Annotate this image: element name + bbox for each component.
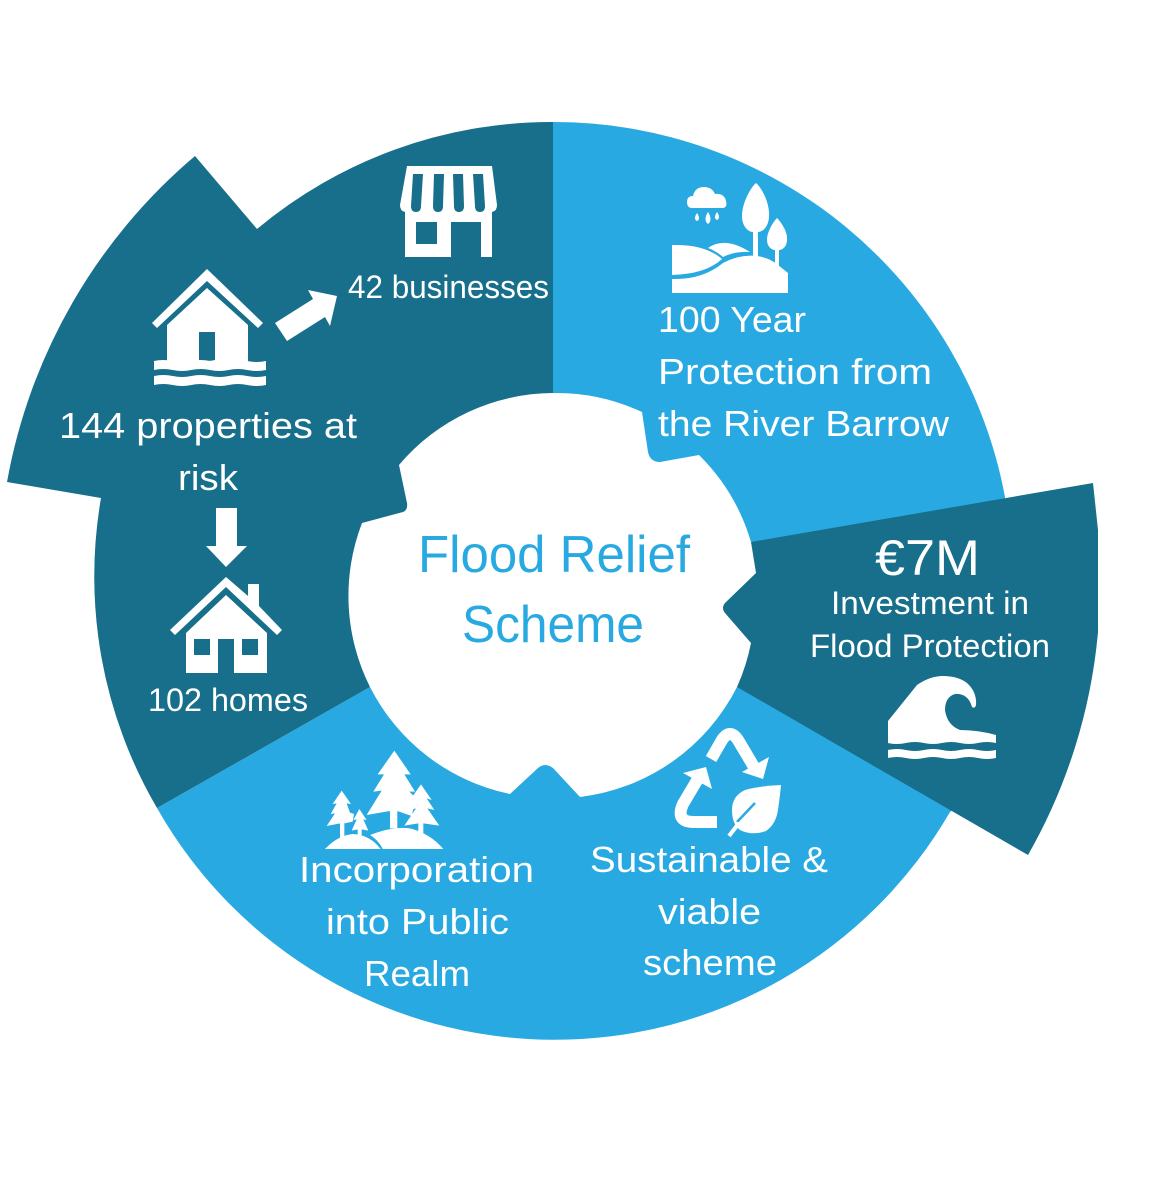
segment: investment arrow: [723, 483, 1098, 855]
label: 42 businesses: 42 businesses: [348, 269, 549, 305]
label: 100 Year Protection from the River Barrow: Protection from: [658, 351, 932, 392]
segment: bottom sustainability and public realm: [157, 680, 965, 1040]
label: 100 Year Protection from the River Barrow: the River Barrow: [658, 403, 950, 444]
label: Incorporation into Public Realm: Incorporation: [299, 849, 534, 890]
segment: properties at risk arrow: [7, 122, 553, 808]
label: Sustainable and viable scheme: [590, 839, 828, 983]
label: 144 properties at risk: risk: [178, 457, 239, 498]
label: 144 properties at risk: 144 properties at: [59, 405, 357, 446]
label: 102 homes: 102 homes: [148, 682, 308, 718]
icon: home: [170, 577, 282, 673]
label: Sustainable and viable scheme: viable: [658, 891, 761, 932]
label: Sustainable and viable scheme: Sustainable &: [590, 839, 828, 880]
label: Investment in Flood Protection: [810, 585, 1050, 664]
arrow: to homes: [206, 508, 247, 567]
label: Investment in Flood Protection: Investment in: [831, 585, 1029, 621]
icon: flooded house: [152, 269, 266, 386]
label: 144 properties at risk: [59, 405, 357, 498]
label: 100 Year Protection from the River Barrow: 100 Year: [658, 299, 806, 340]
icon: shop: [400, 166, 497, 257]
title: Flood Relief Scheme: [418, 526, 691, 654]
label: Incorporation into Public Realm: into Public: [326, 901, 509, 942]
label: investment figure: €7M: [875, 530, 980, 586]
icon: landscape with rain and trees: [672, 183, 788, 293]
label: Sustainable and viable scheme: scheme: [643, 942, 777, 983]
label: 100 Year Protection from the River Barrow: [658, 299, 950, 444]
icon: trees: [325, 751, 443, 849]
icon: wave: [888, 676, 996, 759]
title: Flood Relief Scheme: Scheme: [462, 596, 644, 654]
icon: recycle and leaf: [681, 734, 781, 836]
label: Investment in Flood Protection: Flood Protection: [810, 628, 1050, 664]
label: Incorporation into Public Realm: Realm: [364, 953, 470, 994]
segment: top right protection: [553, 122, 1005, 550]
title: Flood Relief Scheme: Flood Relief: [418, 526, 691, 584]
label: Incorporation into Public Realm: [299, 849, 534, 994]
arrow: to businesses: [275, 290, 337, 341]
